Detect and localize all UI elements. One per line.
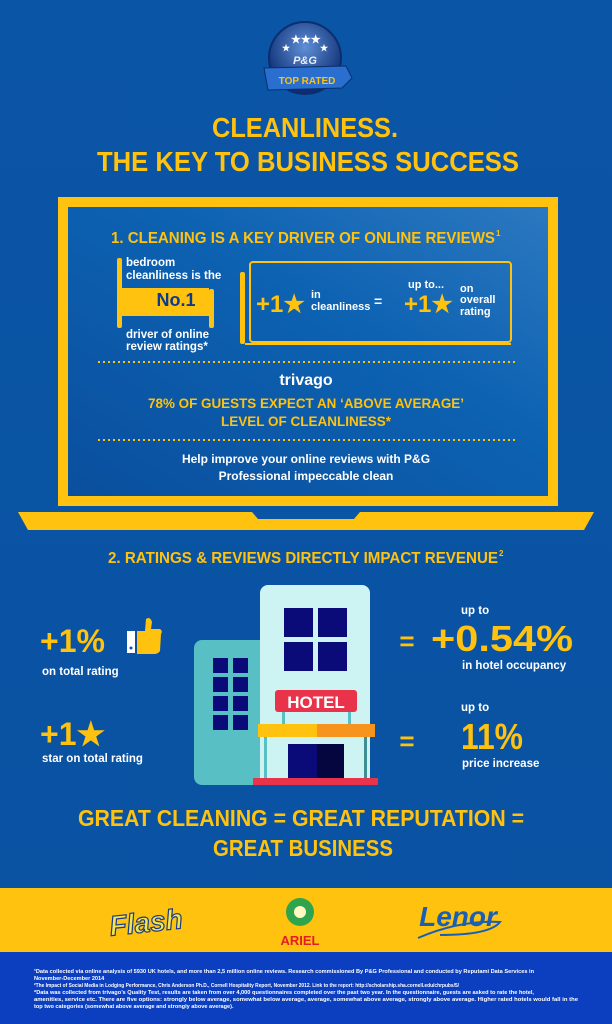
- logo badge: P&G Professional top rated: [264, 22, 352, 94]
- brand logos band: Flash: [108, 903, 184, 942]
- conclusion: GREAT BUSINESS: [213, 835, 393, 861]
- help text: Help improve your online reviews with P&G: [182, 452, 430, 466]
- logo badge: P&G Professional top rated: TOP RATED: [279, 76, 335, 87]
- bed icon with No.1: bedroom: [126, 257, 175, 269]
- stat: occupancy: [431, 605, 573, 672]
- stat: price: up to: [461, 702, 489, 714]
- brand logos band: Lenor: [419, 901, 499, 932]
- stat: +1 star: +1★: [40, 716, 105, 752]
- equals signs: =: [399, 726, 415, 756]
- equation box: =: [374, 293, 382, 309]
- logo badge: P&G Professional top rated: ★: [320, 43, 329, 53]
- laptop: section 1 panel: 1: [496, 229, 501, 238]
- stat: occupancy: up to: [461, 605, 489, 617]
- logo badge: P&G Professional top rated: ★: [282, 43, 291, 53]
- trivago stat: [148, 372, 464, 429]
- stat: price: [461, 702, 539, 770]
- stat: price: 11%: [461, 716, 523, 757]
- title: [97, 112, 519, 177]
- stat: +1%: +1%: [40, 623, 105, 659]
- section 2 heading: 2: [499, 549, 504, 558]
- stat: price: price increase: [462, 758, 539, 770]
- footnotes: November-December 2014: [34, 976, 105, 982]
- equals signs: =: [399, 626, 415, 656]
- footnotes: *Data was collected from trivago’s Quality Test, results are taken from over 4,000 questionnaires completed over the past two year. In the questionnaire, guests are asked to rate the hotel,: [34, 990, 534, 996]
- footnotes: [0, 952, 612, 1024]
- equation box: in: [311, 289, 321, 301]
- conclusion: [78, 805, 524, 861]
- footnotes: amenities, service etc. There are five options: strongly below average, somewhat below average, average, somewhat above average, strongly above average. Higher rated hotels would fall in the: [34, 997, 578, 1003]
- hotel illustration: HOTEL: [287, 693, 345, 712]
- footnotes: ¹Data collected via online analysis of 5930 UK hotels, and more than 2,5 million online reviews. Research commissioned By P&G Professional and conducted by Reputami Data Services in: [34, 968, 535, 975]
- stat: +1 star: [40, 716, 143, 765]
- stat: +1%: on total rating: [42, 666, 119, 678]
- bed icon with No.1: cleanliness is the: [126, 270, 221, 282]
- bed icon with No.1: No.1: [156, 290, 196, 310]
- brand logos band: [0, 888, 612, 952]
- equation box: rating: [460, 306, 491, 318]
- equation box: [240, 262, 511, 344]
- laptop: section 1 panel: [18, 197, 594, 530]
- help text: [182, 452, 430, 483]
- section 1 heading: 1. CLEANING IS A KEY DRIVER OF ONLINE REVIEWS: [111, 230, 495, 247]
- equation box: +1★: [256, 291, 305, 318]
- trivago stat: trivago: [279, 372, 333, 389]
- stat: +1 star: star on total rating: [42, 753, 143, 765]
- equation box: overall: [460, 294, 495, 306]
- conclusion: GREAT CLEANING = GREAT REPUTATION =: [78, 805, 524, 831]
- equation box: on: [460, 283, 474, 295]
- logo badge: P&G Professional top rated: P&G: [293, 55, 317, 67]
- title: THE KEY TO BUSINESS SUCCESS: [97, 146, 519, 177]
- section 2 heading: 2. RATINGS & REVIEWS DIRECTLY IMPACT REVENUE: [108, 550, 498, 567]
- logo badge: P&G Professional top rated: ★★★: [291, 34, 321, 46]
- stat: +1%: [40, 618, 162, 678]
- equation box: up to...: [408, 279, 444, 291]
- bed icon with No.1: driver of online: [126, 329, 209, 341]
- equation box: cleanliness: [311, 301, 370, 313]
- hotel illustration: [194, 585, 378, 785]
- equals signs: [399, 626, 415, 756]
- bed icon with No.1: review ratings*: [126, 341, 208, 353]
- logo badge: P&G Professional top rated: Professional: [281, 67, 329, 76]
- footnotes: ²The Impact of Social Media in Lodging Performance, Chris Anderson Ph.D., Cornell Hospitality Report, November 2012. Link to the report: http://scholarship.sha.cornell.edu/chrpubs/5/: [34, 982, 459, 989]
- trivago stat: LEVEL OF CLEANLINESS*: [221, 414, 392, 429]
- bed icon with No.1: [117, 257, 221, 353]
- help text: Professional impeccable clean: [219, 469, 393, 483]
- stat: occupancy: +0.54%: [431, 618, 573, 659]
- title: CLEANLINESS.: [212, 112, 398, 143]
- trivago stat: 78% OF GUESTS EXPECT AN ‘ABOVE AVERAGE’: [148, 396, 464, 411]
- stat: occupancy: in hotel occupancy: [462, 660, 567, 672]
- brand logos band: ARIEL: [280, 933, 320, 948]
- equation box: +1★: [404, 291, 453, 318]
- footnotes: top two categories (somewhat above average and strongly above average).: [34, 1004, 234, 1010]
